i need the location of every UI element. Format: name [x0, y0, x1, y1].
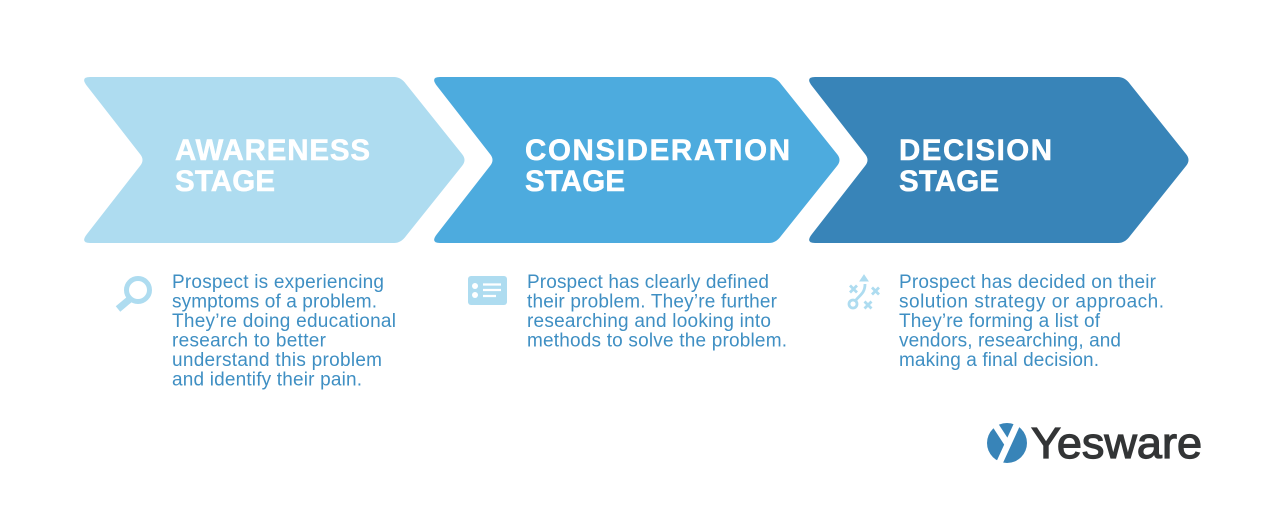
heading: awareness stage: AWARENESS	[175, 134, 370, 167]
heading: awareness stage: STAGE	[175, 165, 275, 198]
icon: logo mark	[987, 420, 1027, 466]
panel: consideration stage	[434, 77, 840, 243]
text: decision description: Prospect has decided on their	[899, 272, 1157, 293]
text: decision description: solution strategy or approach.	[899, 292, 1164, 312]
icon: strategy play diagram	[849, 275, 879, 308]
heading: consideration stage: CONSIDERATION	[525, 134, 790, 167]
panel: decision stage	[809, 77, 1188, 243]
text: consideration description: their problem. They’re further	[527, 292, 778, 312]
text: decision description: They’re forming a list of	[899, 311, 1101, 332]
text: awareness description: They’re doing educational	[172, 311, 396, 332]
icon: magnifying glass	[118, 278, 150, 309]
text: consideration description: methods to solve the problem.	[527, 330, 787, 352]
text: decision description: making a final decision.	[899, 350, 1099, 371]
text: consideration description: Prospect has clearly defined	[527, 272, 769, 293]
heading: decision stage: STAGE	[899, 165, 999, 198]
chevron: consideration	[434, 77, 840, 243]
text: awareness description: and identify their pain.	[172, 370, 362, 390]
text: awareness description: understand this problem	[172, 350, 382, 371]
heading: consideration stage: STAGE	[525, 165, 625, 198]
chevron: awareness	[84, 77, 464, 243]
wordmark: Yesware	[1031, 419, 1202, 468]
text: awareness description: Prospect is experiencing	[172, 272, 384, 293]
text: awareness description: research to better	[172, 330, 327, 352]
text: awareness description: symptoms of a problem.	[172, 292, 377, 312]
panel: awareness stage	[84, 77, 464, 243]
logo: Yesware	[987, 419, 1202, 468]
chevron: decision	[809, 77, 1188, 243]
icon: list card	[468, 276, 507, 305]
heading: decision stage: DECISION	[899, 134, 1052, 167]
text: decision description: vendors, researching, and	[899, 330, 1121, 352]
text: consideration description: researching and looking into	[527, 311, 771, 332]
